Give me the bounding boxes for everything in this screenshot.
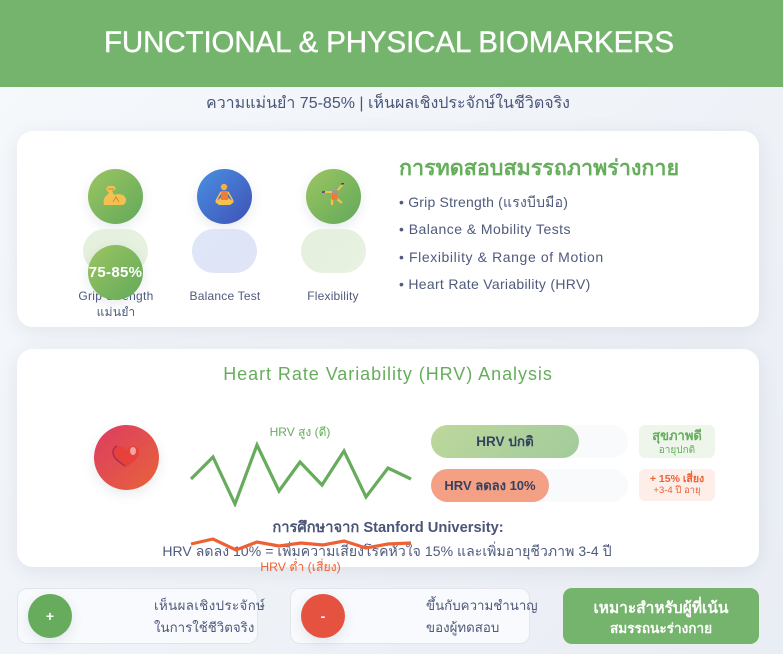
icon: plus: + — [46, 608, 54, 624]
bar fill reduced — [431, 469, 549, 502]
recommendation box — [563, 588, 759, 644]
status risk title: + 15% เสี่ยง — [650, 473, 704, 485]
icon: flexibility cartwheel — [306, 169, 361, 224]
study text: HRV ลดลง 10% = เพิ่มความเสี่ยงโรคหัวใจ 15% และเพิ่มอายุชีวภาพ 3-4 ปี — [162, 543, 612, 559]
status: healthy — [639, 425, 715, 458]
con text: ของผู้ทดสอบ — [426, 620, 499, 635]
pill: grip — [83, 229, 148, 273]
label: grip strength — [78, 289, 154, 319]
status healthy sub: อายุปกติ — [659, 445, 695, 456]
bar: HRV reduced — [431, 469, 628, 502]
badge value: 75-85% — [89, 264, 142, 281]
con card — [290, 588, 530, 644]
bar label normal: HRV ปกติ — [476, 434, 534, 449]
HRV low label: HRV ต่ำ (เสี่ยง) — [260, 560, 341, 574]
icon: grip strength — [88, 169, 143, 224]
con text — [426, 596, 538, 636]
pill: flexibility — [301, 229, 366, 273]
list item: flexibility: • Flexibility & Range of Motion — [399, 249, 604, 265]
label: flexibility: Flexibility — [307, 289, 359, 303]
bar label reduced: HRV ลดลง 10% — [444, 478, 536, 493]
pill: balance — [192, 229, 257, 273]
chart: HRV high line — [190, 441, 412, 507]
status risk sub: +3-4 ปี อายุ — [653, 485, 701, 496]
label: grip strength: แม่นยำ — [97, 305, 135, 319]
recommendation text: สมรรถนะร่างกาย — [610, 621, 712, 636]
recommendation text: เหมาะสำหรับผู้ที่เน้น — [593, 600, 729, 617]
header banner — [0, 0, 783, 87]
recommendation text — [593, 596, 729, 636]
con text: ขึ้นกับความชำนาญ — [426, 598, 538, 613]
pro text: ในการใช้ชีวิตจริง — [154, 620, 254, 635]
pro text: เห็นผลเชิงประจักษ์ — [154, 598, 265, 613]
subtitle: ความแม่นยำ 75-85% | เห็นผลเชิงประจักษ์ในชีวิตจริง — [206, 95, 570, 112]
heading: physical tests: การทดสอบสมรรถภาพร่างกาย — [399, 156, 679, 180]
label: grip strength: Grip Strength — [78, 289, 154, 303]
label: balance test: Balance Test — [190, 289, 260, 303]
icon: heart — [94, 425, 159, 490]
pro card — [17, 588, 258, 644]
chart: HRV low line — [190, 537, 412, 552]
icon: minus — [301, 594, 345, 638]
bar: HRV normal — [431, 425, 628, 458]
HRV high label: HRV สูง (ดี) — [270, 425, 330, 439]
pro text — [154, 598, 265, 635]
list item: hrv: • Heart Rate Variability (HRV) — [399, 276, 591, 292]
bar fill normal — [431, 425, 579, 458]
icon: minus: - — [321, 608, 325, 624]
status: risk — [639, 469, 715, 501]
study heading: การศึกษาจาก Stanford University: — [272, 520, 504, 536]
list item: grip: • Grip Strength (แรงบีบมือ) — [399, 194, 568, 210]
panel: HRV analysis — [17, 349, 759, 567]
icon: balance meditation — [197, 169, 252, 224]
accuracy badge — [88, 245, 143, 300]
icon: plus — [28, 594, 72, 638]
status healthy title: สุขภาพดี — [652, 428, 702, 443]
title: FUNCTIONAL & PHYSICAL BIOMARKERS — [104, 26, 674, 59]
list item: balance: • Balance & Mobility Tests — [399, 221, 571, 237]
panel: physical tests — [17, 131, 759, 327]
heading: HRV: Heart Rate Variability (HRV) Analysis — [223, 364, 553, 384]
